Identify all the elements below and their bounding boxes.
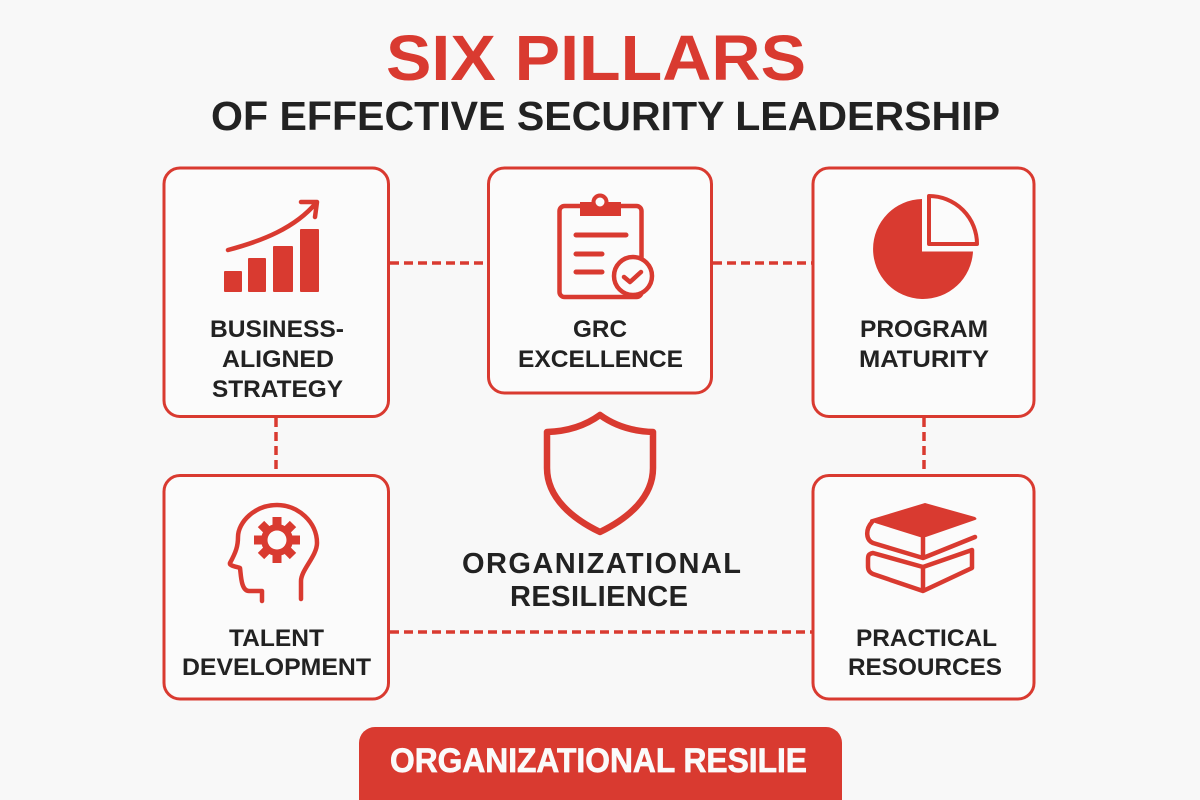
panel: GRC excellence bbox=[488, 168, 712, 393]
title: SIX PILLARS bbox=[386, 22, 806, 94]
label: program maturity: PROGRAM bbox=[860, 316, 988, 343]
label: GRC excellence: EXCELLENCE bbox=[518, 346, 683, 373]
panel: program maturity bbox=[813, 168, 1034, 416]
label: business-aligned strategy: BUSINESS- bbox=[210, 316, 344, 343]
label: business-aligned strategy bbox=[210, 316, 344, 403]
label: organizational resilience bbox=[462, 548, 741, 613]
label: practical resources: PRACTICAL bbox=[856, 625, 997, 652]
connectors between panels bbox=[276, 263, 924, 632]
label: organizational resilience: RESILIENCE bbox=[510, 581, 688, 613]
label: GRC excellence bbox=[518, 316, 683, 373]
bottom banner bbox=[359, 727, 842, 800]
label: GRC excellence: GRC bbox=[573, 316, 627, 343]
label: program maturity bbox=[859, 316, 989, 373]
icon: head with gear bbox=[230, 505, 317, 601]
label: talent development bbox=[182, 625, 371, 681]
label: practical resources: RESOURCES bbox=[848, 654, 1002, 681]
icon: pie chart bbox=[873, 196, 977, 299]
icon: rising bar chart bbox=[224, 202, 319, 292]
label: practical resources bbox=[848, 625, 1002, 681]
label: business-aligned strategy: STRATEGY bbox=[212, 376, 343, 403]
label: talent development: DEVELOPMENT bbox=[182, 654, 371, 681]
label: program maturity: MATURITY bbox=[859, 346, 989, 373]
icon: stacked books bbox=[867, 503, 976, 591]
banner text: ORGANIZATIONAL RESILIE bbox=[390, 742, 807, 780]
subtitle: OF EFFECTIVE SECURITY LEADERSHIP bbox=[211, 93, 1000, 139]
panel: talent development bbox=[164, 476, 388, 699]
icon: clipboard with check bbox=[560, 196, 652, 297]
panel: practical resources bbox=[813, 476, 1034, 699]
icon: shield bbox=[547, 415, 653, 532]
panel: business-aligned strategy bbox=[164, 168, 388, 416]
center: organizational resilience bbox=[462, 415, 741, 613]
label: business-aligned strategy: ALIGNED bbox=[222, 346, 334, 373]
label: organizational resilience: ORGANIZATIONAL bbox=[462, 548, 741, 580]
label: talent development: TALENT bbox=[229, 625, 324, 652]
